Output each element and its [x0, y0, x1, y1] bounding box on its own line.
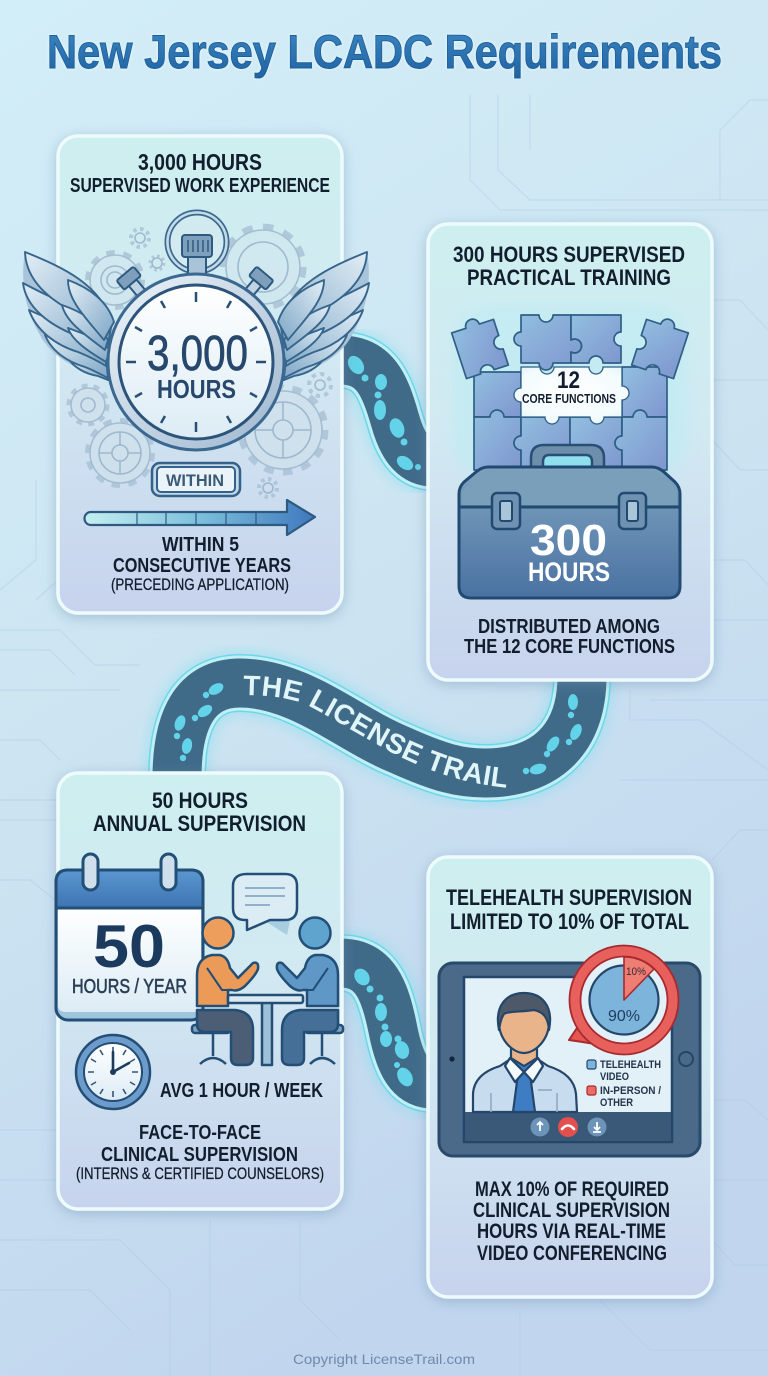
icon: calendar: 50 [93, 913, 165, 980]
icon: stopwatch: HOURS [157, 374, 236, 404]
icon: calendar: HOURS / YEAR [72, 976, 187, 998]
footprints on main road [173, 681, 584, 776]
icon: puzzle: CORE FUNCTIONS [522, 391, 616, 406]
legend: TELEHEALTH [600, 1059, 661, 1071]
heading: 3,000 HOURS [138, 149, 262, 175]
heading: SUPERVISED WORK EXPERIENCE [70, 175, 330, 197]
person: counselor left [197, 918, 258, 1065]
text: distributed among: THE 12 CORE FUNCTIONS [464, 636, 675, 658]
heading: 300 HOURS SUPERVISED [453, 242, 685, 267]
text: within 5 years: CONSECUTIVE YEARS [113, 555, 291, 577]
text: face-to-face clinical supervision [76, 1122, 324, 1183]
icon: two people at a table [192, 918, 343, 1065]
text: face-to-face clinical supervision: (INTERNS & CERTIFIED COUNSELORS) [76, 1164, 324, 1183]
text: within 5 years: (PRECEDING APPLICATION) [111, 575, 289, 594]
heading: LIMITED TO 10% OF TOTAL [450, 909, 689, 934]
within badge: WITHIN [166, 471, 224, 490]
text: average hour per week: AVG 1 HOUR / WEEK [160, 1080, 323, 1102]
text: max 10% note: MAX 10% OF REQUIRED [475, 1178, 669, 1201]
text: max 10% note: CLINICAL SUPERVISION [473, 1199, 670, 1222]
panel: 3,000 hours [23, 136, 369, 613]
text: max 10% note [473, 1178, 670, 1265]
text: within 5 years: WITHIN 5 [162, 534, 239, 556]
table top [228, 995, 303, 1003]
text: max 10% note: VIDEO CONFERENCING [477, 1242, 667, 1265]
panel: telehealth [428, 857, 712, 1297]
text: face-to-face clinical supervision: CLINICAL SUPERVISION [101, 1144, 298, 1166]
legend: OTHER [600, 1097, 633, 1109]
call buttons [530, 1117, 606, 1137]
panel: 50 hours [56, 773, 343, 1209]
heading: 50 HOURS [152, 788, 248, 813]
heading: PRACTICAL TRAINING [467, 265, 671, 290]
stools and table [192, 1002, 343, 1065]
legend [587, 1059, 661, 1109]
icon: stopwatch [108, 212, 284, 450]
icon: left wing [23, 252, 114, 380]
heading [93, 788, 306, 836]
heading [453, 242, 685, 290]
icon: calendar [56, 854, 203, 1020]
icon: tablet [439, 963, 700, 1156]
icon: clock [76, 1035, 150, 1109]
icon: puzzle: 12 [557, 367, 580, 394]
panel: 300 hours [428, 224, 712, 680]
footer: Copyright LicenseTrail.com [293, 1351, 475, 1367]
text: distributed among: DISTRIBUTED AMONG [478, 616, 660, 638]
icon: stopwatch: 3,000 [147, 327, 248, 381]
legend: VIDEO [600, 1071, 629, 1083]
arrow: timeline [85, 500, 315, 535]
chart: 10% pie callout [569, 946, 678, 1054]
heading: ANNUAL SUPERVISION [93, 811, 306, 836]
icon: toolbox: HOURS [528, 557, 610, 587]
heading [446, 885, 692, 934]
road label: THE LICENSE TRAIL [244, 676, 506, 788]
legend: IN-PERSON / [600, 1085, 661, 1097]
chart: 10% pie callout: 10% [626, 966, 646, 978]
icon: right wing [278, 252, 369, 380]
icon: toolbox: 300 [530, 516, 607, 565]
person: supervisee right [277, 918, 338, 1065]
text: within 5 years [111, 534, 291, 594]
text: max 10% note: HOURS VIA REAL-TIME [477, 1220, 666, 1243]
trail: connector between card 3 and card 4 [340, 963, 430, 1089]
trail: connector between card 1 and card 2 [340, 353, 430, 473]
trail: the license trail main road [140, 646, 618, 809]
icon: speech bubble [233, 874, 297, 935]
icon: gears [69, 227, 331, 497]
heading [70, 149, 330, 197]
chart: 10% pie callout: 90% [608, 1008, 640, 1025]
within badge [152, 463, 240, 496]
text: face-to-face clinical supervision: FACE-TO-FACE [139, 1122, 261, 1144]
icon: puzzle [449, 305, 691, 480]
heading: TELEHEALTH SUPERVISION [446, 885, 692, 910]
icon: toolbox [459, 445, 680, 598]
person on screen [473, 993, 577, 1112]
text: distributed among [464, 616, 675, 658]
